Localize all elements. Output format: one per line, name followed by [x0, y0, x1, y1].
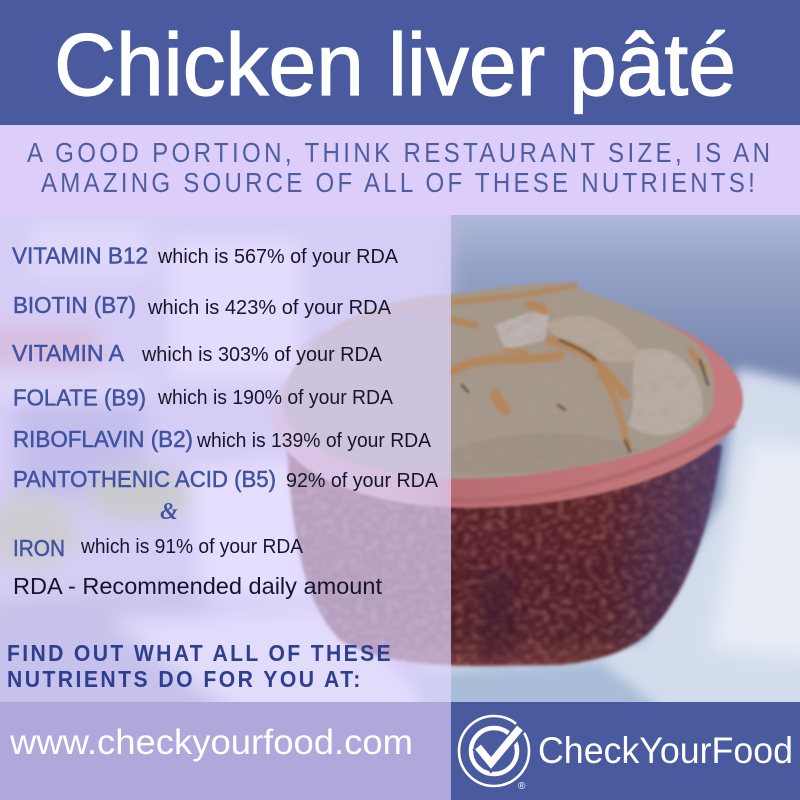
header band	[0, 0, 800, 125]
rim	[271, 300, 743, 508]
website panel: www.checkyourfood.com	[9, 723, 413, 762]
pâté	[282, 280, 718, 480]
row: riboflavin: RIBOFLAVIN (B2)	[13, 426, 193, 452]
row: iron: which is 91% of your RDA	[80, 536, 304, 558]
row: folate: FOLATE (B9)	[13, 384, 146, 410]
bowl body	[286, 443, 724, 669]
nutrient list	[12, 242, 439, 561]
call to action	[7, 640, 391, 692]
row: folate: which is 190% of your RDA	[157, 387, 394, 409]
call to action: NUTRIENTS DO FOR YOU AT:	[7, 666, 360, 692]
row: folate	[13, 384, 394, 410]
title: Chicken liver pâté	[54, 15, 736, 114]
row: pantothenic acid: 92% of your RDA	[286, 470, 439, 492]
RDA definition: RDA - Recommended daily amount	[13, 573, 383, 599]
row: biotin: BIOTIN (B7)	[13, 292, 136, 318]
call to action: FIND OUT WHAT ALL OF THESE	[7, 640, 391, 666]
subtitle panel: AMAZING SOURCE OF ALL OF THESE NUTRIENTS!	[41, 166, 755, 198]
row: vitamin A: which is 303% of your RDA	[141, 344, 383, 366]
logo wordmark: CheckYourFood	[538, 730, 793, 771]
photo fade overlay	[0, 215, 451, 702]
logo panel	[451, 702, 800, 800]
row: riboflavin: which is 139% of your RDA	[196, 430, 432, 452]
row: vitamin B12	[12, 242, 399, 268]
website panel	[0, 702, 451, 800]
photo: pâté in a terracotta bowl	[0, 215, 800, 702]
row: biotin	[13, 292, 392, 319]
row: iron: IRON	[13, 535, 65, 561]
row: biotin: which is 423% of your RDA	[147, 297, 392, 319]
row: vitamin B12: VITAMIN B12	[12, 242, 148, 268]
ampersand: &	[160, 499, 178, 525]
registered mark: ®	[518, 781, 526, 792]
subtitle panel	[0, 125, 800, 215]
row: vitamin B12: which is 567% of your RDA	[157, 246, 399, 268]
row: vitamin A	[12, 340, 383, 366]
row: vitamin A: VITAMIN A	[12, 340, 125, 366]
row: pantothenic acid: PANTOTHENIC ACID (B5)	[13, 466, 276, 492]
subtitle panel: A GOOD PORTION, THINK RESTAURANT SIZE, IS AN	[27, 136, 770, 168]
row: riboflavin	[13, 426, 432, 452]
row: iron	[13, 535, 304, 561]
icon: check mark in circles	[459, 716, 529, 786]
paper	[420, 368, 800, 740]
row: pantothenic acid	[13, 466, 439, 492]
